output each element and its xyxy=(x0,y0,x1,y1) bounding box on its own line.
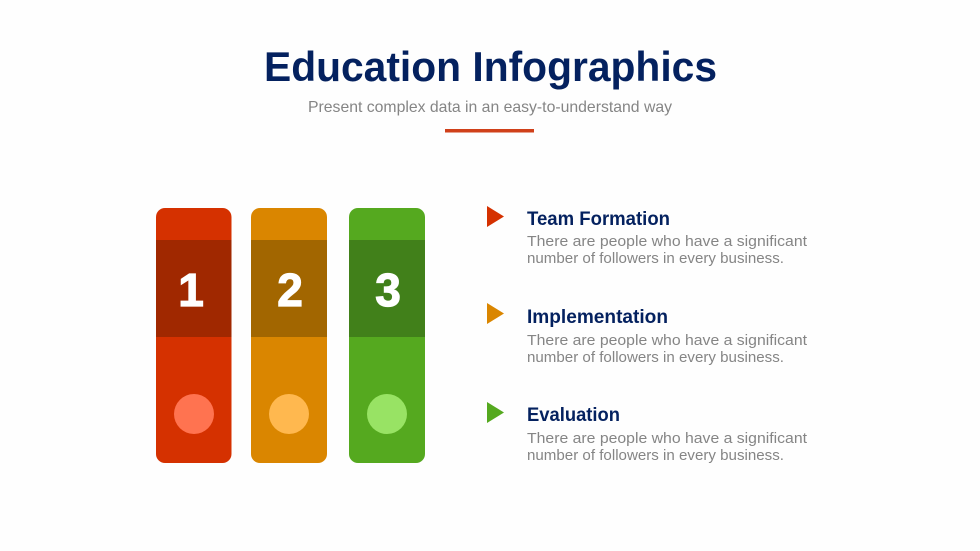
item 1 text xyxy=(527,209,808,267)
body text 2 xyxy=(527,332,808,366)
body text 2: There are people who have a significant xyxy=(527,332,808,349)
heading: Evaluation: Evaluation xyxy=(527,405,620,426)
dot 2 xyxy=(269,394,309,434)
icon: red arrow xyxy=(487,206,504,227)
item 2 text xyxy=(527,307,808,366)
body text 3: number of followers in every business. xyxy=(527,447,784,464)
number 2: 2 xyxy=(277,264,303,316)
heading: Team Formation: Team Formation xyxy=(527,209,670,230)
subtitle: Present complex data in an easy-to-understand way xyxy=(308,99,672,116)
icon: orange arrow xyxy=(487,303,504,324)
body text 2: number of followers in every business. xyxy=(527,349,784,366)
number 3: 3 xyxy=(375,264,401,316)
heading: Implementation: Implementation xyxy=(527,307,668,328)
item 3 text xyxy=(527,405,808,464)
title: Education Infographics xyxy=(264,43,717,90)
body text 3: There are people who have a significant xyxy=(527,430,808,447)
title underline xyxy=(445,129,534,132)
body text 1: There are people who have a significant xyxy=(527,233,808,250)
icon: green arrow xyxy=(487,402,504,423)
body text 3 xyxy=(527,430,808,464)
panel: column 1 xyxy=(156,208,232,463)
body text 1: number of followers in every business. xyxy=(527,250,784,267)
dot 1 xyxy=(174,394,214,434)
dot 3 xyxy=(367,394,407,434)
panel: column 2 xyxy=(251,208,327,463)
panel: column 3 xyxy=(349,208,425,463)
number 1: 1 xyxy=(178,264,204,316)
body text 1 xyxy=(527,233,808,267)
